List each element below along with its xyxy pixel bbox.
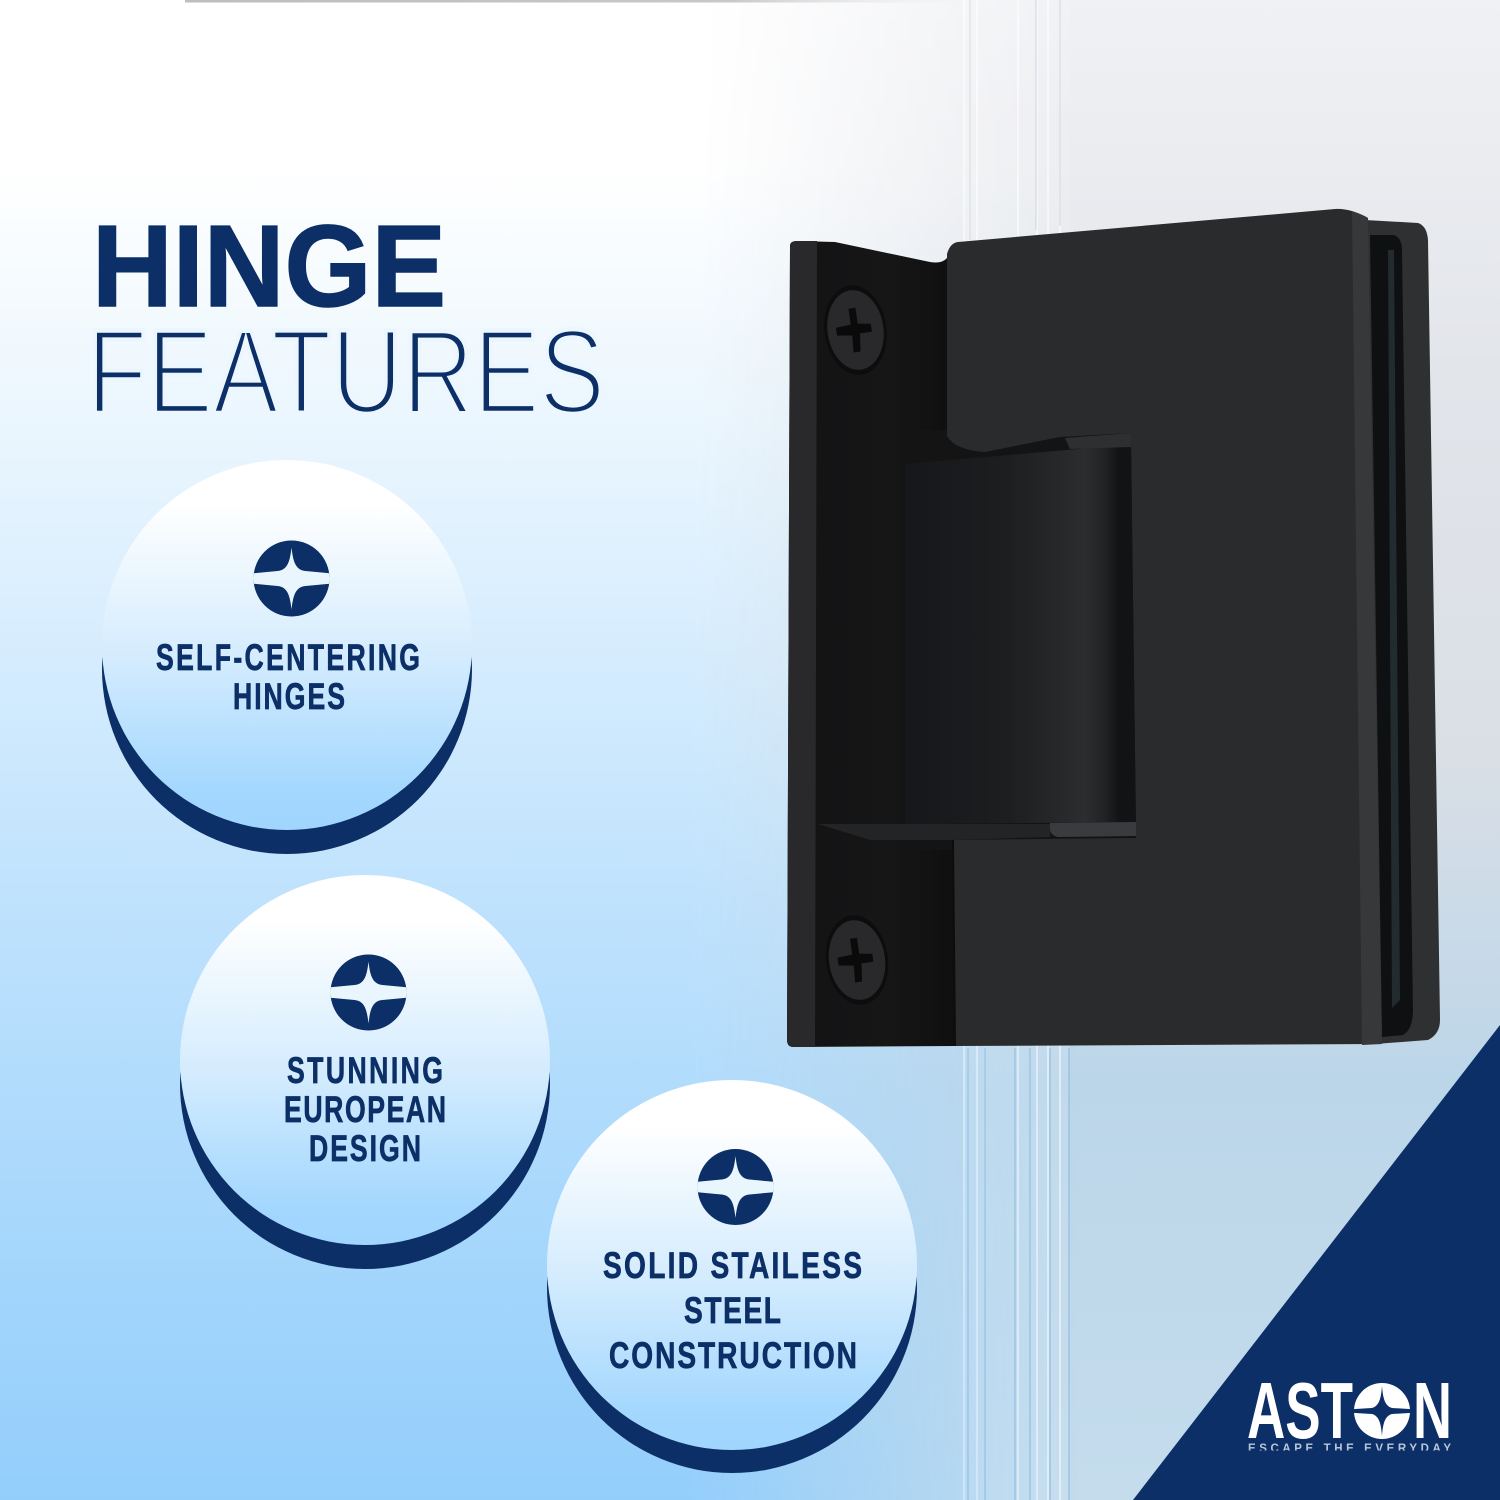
label [156, 637, 420, 717]
icon: star disc [696, 1149, 776, 1225]
label [603, 1244, 862, 1376]
icon: lower screw [820, 911, 894, 1009]
hinge: wall plate edge [787, 241, 817, 1047]
logo: ASTON: AST [1247, 1366, 1353, 1455]
label: STEEL [684, 1289, 781, 1331]
label: SOLID STAILESS [603, 1244, 862, 1286]
logo: tagline: ESCAPE THE EVERYDAY [1248, 1443, 1451, 1455]
label [284, 1050, 446, 1169]
hinge: knuckle [905, 446, 1136, 824]
label: CONSTRUCTION [609, 1334, 857, 1376]
icon: upper screw [819, 281, 892, 379]
title [87, 201, 605, 439]
hinge: upper barrel collar [1065, 433, 1131, 449]
top edge line [185, 0, 965, 2]
title: FEATURES: FEATURES [87, 305, 605, 439]
logo: ASTON [1248, 1382, 1451, 1450]
hinge: dark recess behind knuckle [900, 430, 1140, 850]
hinge: lower collar [818, 824, 1050, 840]
icon: star disc [328, 954, 408, 1030]
label: HINGES [233, 676, 345, 717]
hinge: wall plate [787, 241, 955, 1047]
label: STUNNING [287, 1050, 443, 1091]
hinge: rear glass clamp plate [1365, 220, 1440, 1044]
label: SELF-CENTERING [156, 637, 420, 678]
logo: star O [1347, 1383, 1417, 1439]
logo: ASTON: N [1413, 1366, 1452, 1455]
hinge: lower block edge [953, 840, 955, 1046]
icon: star disc [252, 540, 332, 616]
corner triangle [1133, 1025, 1500, 1500]
feature badge: self-centering hinges [102, 460, 472, 854]
hinge: glass edge highlight [1388, 250, 1400, 1008]
hinge product photo [787, 209, 1440, 1047]
label: EUROPEAN [284, 1089, 446, 1130]
hinge: upper block and door plate [947, 209, 1382, 1046]
feature badge: solid stainless steel construction [547, 1080, 917, 1473]
label: DESIGN [309, 1128, 421, 1169]
hinge: side band [1352, 212, 1382, 1045]
feature badge: stunning european design [180, 875, 550, 1269]
hinge: glass slot [1370, 235, 1413, 1037]
title: HINGE: HINGE [92, 201, 446, 331]
background: white to blue gradient wash [0, 0, 1038, 1500]
